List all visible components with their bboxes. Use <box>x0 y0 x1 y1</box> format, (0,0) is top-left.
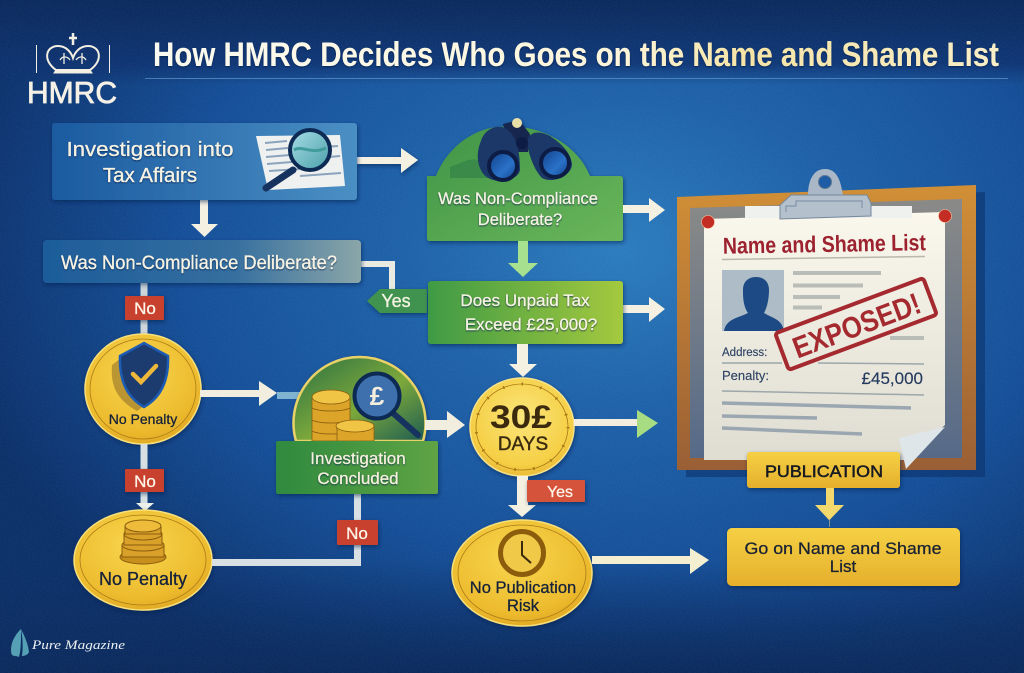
tag: yes pointer <box>367 289 427 313</box>
arrow: no publication to go on list <box>592 548 709 574</box>
icon: coin stack <box>120 520 166 564</box>
node: investigation concluded: £ <box>370 381 385 411</box>
paper title: Name and Shame List <box>723 229 926 259</box>
box: does unpaid tax exceed: Exceed £25,000? <box>465 315 597 334</box>
connector: no line 2 <box>140 444 148 505</box>
paper <box>704 206 945 460</box>
box: go on name and shame list: List <box>830 557 856 576</box>
arrow: days to list <box>574 410 658 438</box>
node: no penalty coins: No Penalty <box>99 569 187 589</box>
connector: deliberate question to yes tag <box>361 264 392 290</box>
clip <box>780 169 871 219</box>
node: no penalty shield: No Penalty <box>109 411 177 427</box>
node: no penalty coins <box>74 510 212 610</box>
tag: no 2 <box>125 469 164 492</box>
tag: no 1 <box>125 296 164 320</box>
icon: binoculars <box>478 118 572 181</box>
connector: investigation to green decision <box>357 148 418 173</box>
tag: no 1: No <box>134 299 156 318</box>
arrow: unpaid tax to list <box>623 297 665 322</box>
tag: no 3: No <box>346 524 368 543</box>
investigation text: Investigation into <box>66 138 234 161</box>
box: go on name and shame list: Go on Name and Shame <box>744 539 942 558</box>
connector: investigation to deliberate question <box>191 200 218 237</box>
node: no publication risk: Risk <box>507 597 540 615</box>
arrow: publication to go on list <box>815 488 844 527</box>
node: 30 days clock: DAYS <box>498 434 548 455</box>
tag: yes red: Yes <box>547 484 573 501</box>
HMRC logo <box>27 33 117 110</box>
green decision text: Was Non-Compliance <box>438 190 598 208</box>
arrow: no penalty to investigation concluded <box>200 381 306 406</box>
node: no publication risk: No Publication <box>470 579 576 597</box>
label: publication: PUBLICATION <box>765 462 883 481</box>
node: investigation concluded: Concluded <box>317 469 399 488</box>
green decision text: Deliberate? <box>478 211 562 229</box>
arrow: days to no publication <box>508 476 536 517</box>
node: 30 days clock <box>470 378 574 476</box>
tag: yes red <box>527 480 585 502</box>
node: no penalty shield <box>85 334 201 444</box>
node: green decision with binoculars <box>427 118 623 241</box>
icon: clock <box>500 532 544 574</box>
box: does unpaid tax exceed <box>428 281 623 344</box>
investigation text: Tax Affairs <box>103 164 197 187</box>
arrow: green decision to list <box>623 198 665 222</box>
tag: no 3 <box>337 520 378 545</box>
arrow: concluded to days <box>425 411 465 438</box>
label: publication <box>747 452 900 488</box>
tag: no 2: No <box>134 472 156 491</box>
pins <box>702 210 952 228</box>
connector: no penalty to concluded <box>212 494 358 562</box>
icon: shield <box>112 343 168 411</box>
box: was non-compliance deliberate (blue): Was Non-Compliance Deliberate? <box>61 252 337 274</box>
arrow: unpaid tax to days <box>509 344 537 377</box>
watermark: pure magazine: Pure Magazine <box>31 637 125 652</box>
node: no publication risk <box>452 520 592 626</box>
penalty label: Penalty: <box>722 368 769 383</box>
clipboard: name and shame list <box>677 169 985 477</box>
stamp: exposed: EXPOSED! <box>788 287 925 365</box>
box: investigation into tax affairs <box>52 123 357 200</box>
penalty amount: £45,000 <box>862 369 923 388</box>
connector: no line 1 <box>140 283 148 334</box>
logo wordmark: HMRC <box>27 75 117 110</box>
node: investigation concluded <box>276 357 438 494</box>
watermark: pure magazine <box>11 629 125 657</box>
box: was non-compliance deliberate (blue) <box>43 240 361 283</box>
arrow: green decision down <box>508 241 538 277</box>
curled page corner <box>899 427 945 469</box>
tag: yes pointer: Yes <box>381 291 411 311</box>
address label: Address: <box>722 347 767 359</box>
icon: document and magnifier <box>256 130 345 190</box>
box: does unpaid tax exceed: Does Unpaid Tax <box>460 291 590 310</box>
profile photo <box>722 270 784 331</box>
icon: coins and magnifier <box>312 374 418 441</box>
node: 30 days clock: 30£ <box>490 399 552 435</box>
box: go on name and shame list <box>727 528 960 586</box>
arrowhead: no line 2 <box>136 503 154 511</box>
node: investigation concluded: Investigation <box>310 449 406 468</box>
